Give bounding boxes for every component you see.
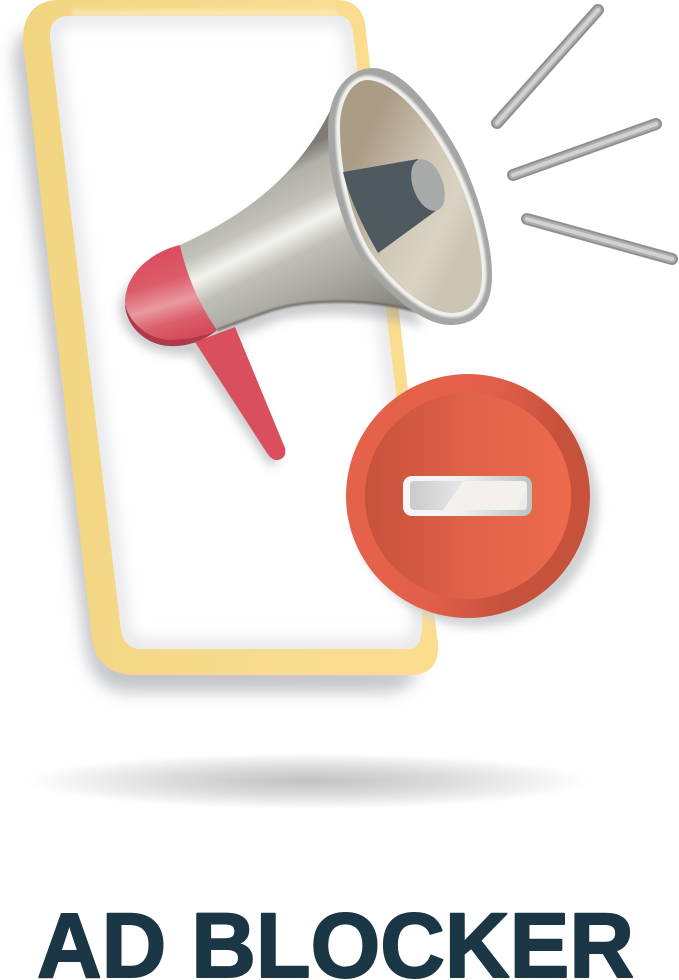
megaphone cone lower edge bbox=[217, 302, 418, 330]
icon: sound rays bbox=[497, 10, 672, 259]
icon: megaphone bbox=[125, 68, 492, 460]
megaphone bell rim bbox=[328, 68, 492, 325]
phone shadow bbox=[14, 28, 420, 692]
megaphone handle bbox=[195, 327, 285, 460]
minus bar bbox=[403, 476, 532, 516]
megaphone grip bbox=[125, 245, 217, 340]
megaphone rim highlight bbox=[340, 80, 482, 313]
badge outer ring bbox=[346, 374, 590, 618]
megaphone grip underside bbox=[125, 300, 217, 346]
ray middle bbox=[513, 124, 656, 175]
ray top bbox=[497, 10, 598, 123]
megaphone driver bbox=[343, 159, 437, 253]
badge shadow bbox=[356, 385, 598, 627]
megaphone cone bbox=[180, 100, 418, 330]
icon: smartphone bbox=[23, 0, 440, 675]
megaphone driver cap bbox=[405, 154, 451, 216]
phone frame bbox=[23, 0, 438, 675]
phone frame highlight bbox=[72, 10, 338, 16]
megaphone bell inside bbox=[340, 80, 482, 313]
ground shadow bbox=[26, 753, 590, 809]
megaphone shadow bbox=[120, 115, 423, 467]
phone screen bbox=[40, 10, 440, 660]
badge inner disc bbox=[365, 393, 571, 599]
ray bottom bbox=[527, 219, 672, 259]
icon: minus badge bbox=[346, 374, 590, 618]
